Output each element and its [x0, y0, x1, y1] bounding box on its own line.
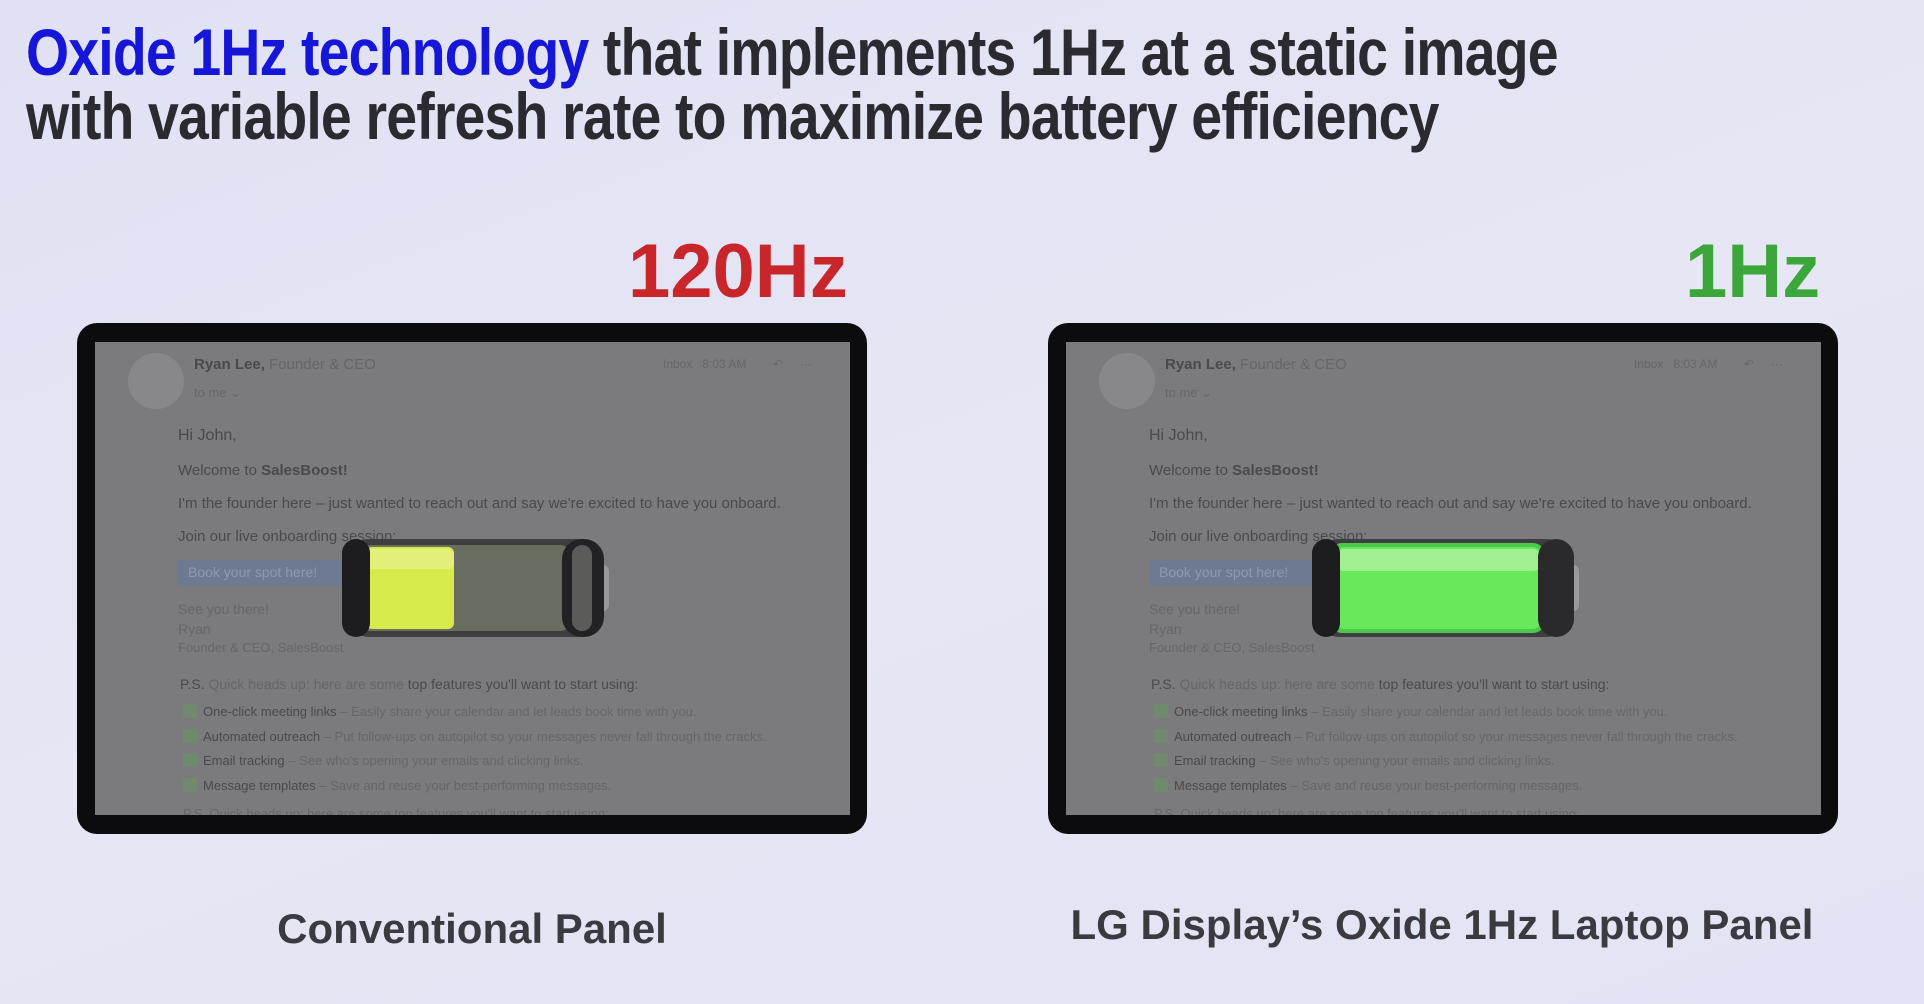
title: Oxide 1Hz technology that implements 1Hz at a static image — [26, 15, 1558, 89]
panel: LG oxide monitor — [1048, 323, 1838, 834]
screen: email: Welcome to SalesBoost! — [1149, 462, 1319, 479]
screen: email: Hi John, — [1149, 427, 1208, 444]
caption: conventional: Conventional Panel — [277, 905, 667, 952]
screen: email — [1066, 342, 1821, 815]
screen: email: See you there! — [178, 601, 269, 617]
screen: email: P.S. Quick heads up: here are some top features you'll want to start using: — [1151, 676, 1609, 692]
screen: email: I'm the founder here – just wanted to reach out and say we're excited to have you onboard. — [178, 495, 781, 512]
screen: email: Email tracking – See who's opening your emails and clicking links. — [203, 753, 583, 768]
screen: email: Join our live onboarding session: — [178, 528, 396, 545]
screen: email: Inbox 8:03 AM ↶ ··· — [663, 357, 812, 371]
screen: email — [95, 342, 850, 815]
screen: email: Book your spot here! — [188, 564, 317, 580]
screen: email: P.S. Quick heads up: here are some top features you'll want to start using: — [180, 676, 638, 692]
screen: email: Ryan — [1149, 621, 1182, 637]
screen: email: Ryan — [178, 621, 211, 637]
screen: email: Welcome to SalesBoost! — [178, 462, 348, 479]
label: 120Hz: 120Hz — [628, 229, 848, 314]
icon: full battery — [1312, 539, 1579, 637]
label: 1Hz: 1Hz — [1685, 229, 1820, 314]
screen: email: Join our live onboarding session: — [1149, 528, 1367, 545]
screen: email: to me ⌄ — [194, 385, 241, 400]
screen: email: to me ⌄ — [1165, 385, 1212, 400]
screen: email: Automated outreach – Put follow-ups on autopilot so your messages never fall through the cracks. — [1174, 729, 1738, 744]
panel: conventional monitor — [77, 323, 867, 834]
screen: email: Message templates – Save and reuse your best-performing messages. — [203, 778, 611, 793]
screen: email: Email tracking – See who's opening your emails and clicking links. — [1174, 753, 1554, 768]
title: with variable refresh rate to maximize battery efficiency — [26, 79, 1439, 153]
screen: email: One-click meeting links – Easily share your calendar and let leads book time with you. — [203, 704, 697, 719]
screen: email: See you there! — [1149, 601, 1240, 617]
screen: email: Founder & CEO, SalesBoost — [178, 640, 343, 655]
screen: email: Inbox 8:03 AM ↶ ··· — [1634, 357, 1783, 371]
screen: email: One-click meeting links – Easily share your calendar and let leads book time with you. — [1174, 704, 1668, 719]
screen: email: Book your spot here! — [1159, 564, 1288, 580]
screen: email: I'm the founder here – just wanted to reach out and say we're excited to have you onboard. — [1149, 495, 1752, 512]
caption: LG Display: LG Display’s Oxide 1Hz Laptop Panel — [1071, 901, 1813, 948]
screen: email: Ryan Lee, Founder & CEO — [194, 356, 376, 373]
screen: email: Automated outreach – Put follow-ups on autopilot so your messages never fall through the cracks. — [203, 729, 767, 744]
screen: email: Ryan Lee, Founder & CEO — [1165, 356, 1347, 373]
screen: email: Hi John, — [178, 427, 237, 444]
screen: email: Message templates – Save and reuse your best-performing messages. — [1174, 778, 1582, 793]
screen: email: Founder & CEO, SalesBoost — [1149, 640, 1314, 655]
icon: half battery — [342, 539, 609, 637]
title — [26, 15, 1558, 153]
